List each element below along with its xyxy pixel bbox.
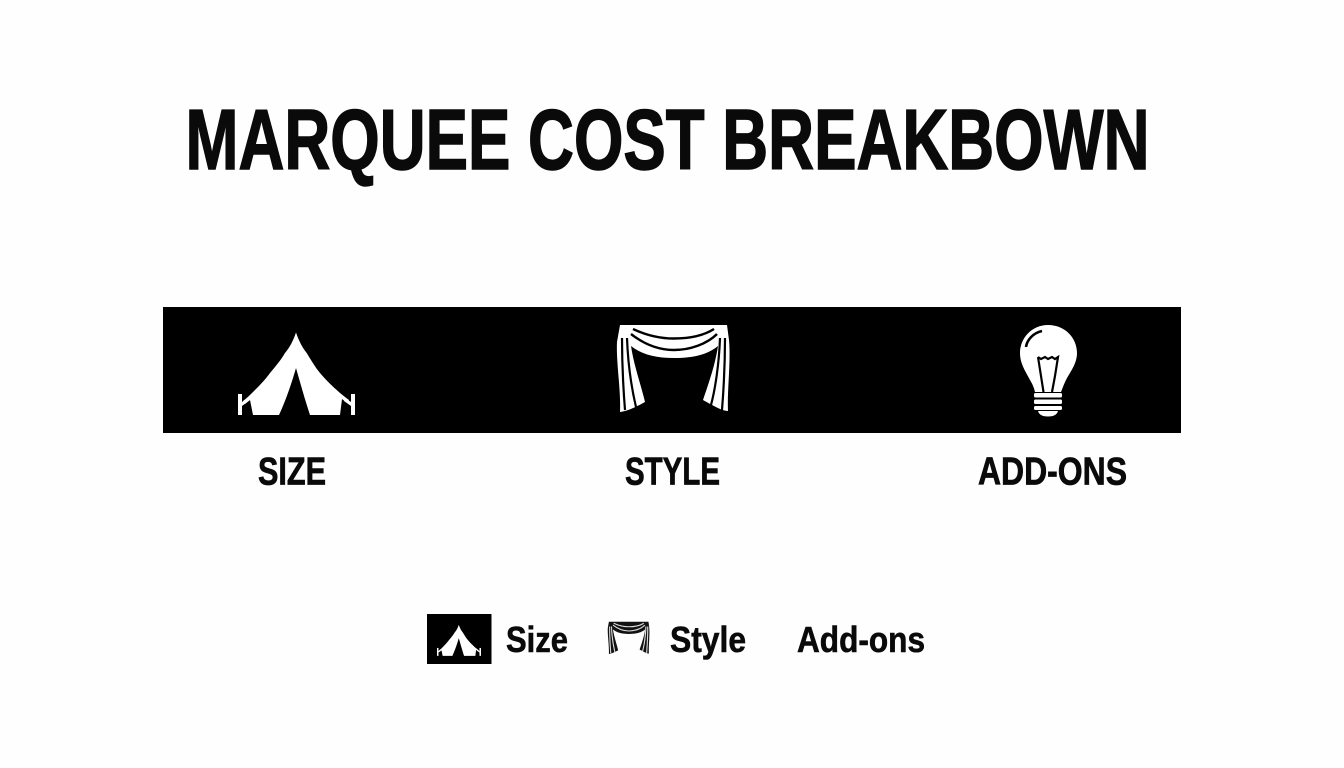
icon: light bulb	[1020, 325, 1077, 416]
label: style: STYLE	[625, 450, 720, 494]
label: size: SIZE	[258, 450, 326, 494]
label: add-ons: ADD-ONS	[978, 450, 1127, 494]
legend icon: style	[608, 622, 649, 654]
legend text: size: Size	[506, 619, 568, 660]
legend icon: size	[427, 614, 492, 664]
legend text: style: Style	[670, 619, 746, 660]
panel: icon band	[163, 307, 1181, 433]
legend text: add-ons: Add-ons	[797, 619, 925, 660]
legend	[427, 614, 925, 664]
icon: curtain	[617, 325, 730, 412]
icon: tent	[238, 332, 355, 415]
